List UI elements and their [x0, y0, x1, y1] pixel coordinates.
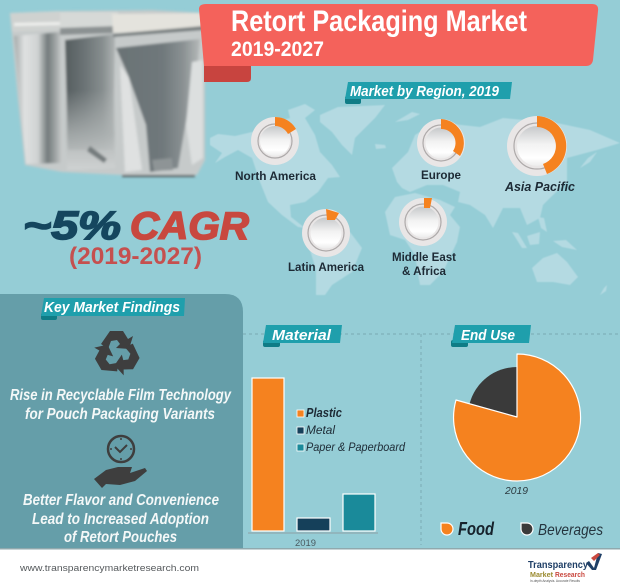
logo: In-depth Analysis. Accurate Results — [530, 579, 580, 583]
label — [392, 250, 456, 278]
donut: Asia Pacific — [504, 116, 576, 194]
CAGR period: (2019-2027) — [69, 243, 202, 270]
slice: beverages — [470, 367, 517, 417]
donut: Europe — [417, 119, 465, 182]
pouch silhouette — [10, 10, 205, 175]
legend: material: Metal — [306, 423, 335, 437]
banner body — [199, 4, 598, 66]
footer — [0, 548, 620, 586]
tag: key market findings: Key Market Findings — [44, 299, 180, 316]
legend: end use: Beverages — [538, 522, 603, 539]
title banner — [199, 4, 598, 82]
logo — [528, 553, 602, 583]
CAGR word: CAGR — [130, 205, 249, 248]
legend: material — [297, 406, 405, 454]
finding 2 text: of Retort Pouches — [64, 529, 177, 546]
donut: Latin America — [288, 209, 364, 274]
icon: recycling arrows — [90, 331, 144, 378]
icon: clock over hand — [94, 436, 147, 488]
CAGR value: ~5% — [23, 204, 121, 248]
bar: plastic — [252, 378, 284, 531]
label: Middle East — [392, 250, 456, 264]
dashed dividers — [243, 334, 620, 545]
tag: end use — [451, 325, 531, 347]
label: & Africa — [402, 264, 446, 278]
pouch left — [14, 32, 62, 164]
tag: end use: End Use — [461, 327, 515, 344]
title: Retort Packaging Market — [231, 5, 527, 38]
pie chart — [454, 354, 581, 481]
panel: end use — [441, 325, 603, 539]
logo: Market — [530, 572, 554, 579]
panel: material — [248, 325, 405, 549]
tag: material: Material — [272, 327, 332, 344]
donut: Middle East and Africa — [392, 198, 456, 278]
pie year label: 2019 — [504, 485, 528, 497]
bar: paper and paperboard — [343, 494, 375, 531]
legend: material: Plastic — [306, 406, 342, 420]
finding 2 text: Better Flavor and Convenience — [23, 492, 219, 509]
slice: food — [454, 354, 581, 481]
banner fold — [204, 60, 251, 82]
title years: 2019-2027 — [231, 38, 324, 61]
product photo: retort pouches — [10, 10, 205, 177]
pouch right — [112, 13, 204, 33]
finding 2 text — [23, 492, 219, 546]
axis label: 2019 — [295, 538, 316, 549]
finding 1 text — [10, 387, 232, 423]
finding 1 text: for Pouch Packaging Variants — [25, 406, 215, 423]
label: Europe — [421, 168, 461, 182]
tag: market by region: Market by Region, 2019 — [350, 83, 500, 100]
logo: Research — [555, 572, 585, 579]
panel: key market findings — [0, 294, 243, 549]
finding 1 text: Rise in Recyclable Film Technology — [10, 387, 232, 404]
world map — [210, 104, 620, 295]
legend: material: Paper & Paperboard — [306, 440, 405, 454]
bar: metal — [297, 518, 330, 531]
label: Latin America — [288, 260, 364, 274]
website url: www.transparencymarketresearch.com — [19, 563, 199, 574]
label: North America — [235, 169, 316, 183]
donut: North America — [235, 117, 316, 183]
finding 2 text: Lead to Increased Adoption — [32, 511, 209, 528]
CAGR callout — [23, 204, 249, 270]
tag: material — [263, 325, 342, 347]
legend: end use — [441, 519, 603, 539]
logo: Transparency — [528, 559, 588, 571]
label: Asia Pacific — [504, 179, 576, 194]
pouch middle — [60, 12, 118, 28]
bar chart — [248, 378, 378, 533]
legend: end use: Food — [458, 519, 495, 539]
